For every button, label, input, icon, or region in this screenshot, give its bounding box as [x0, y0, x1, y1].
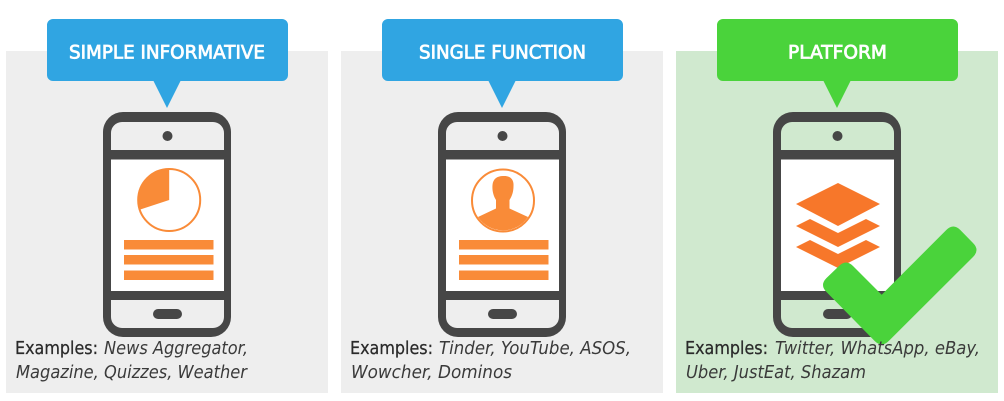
examples text: Uber, JustEat, Shazam: [686, 363, 866, 383]
examples text: Tinder, YouTube, ASOS,: [439, 339, 631, 359]
examples text: Magazine, Quizzes, Weather: [16, 363, 249, 383]
examples text: Twitter, WhatsApp, eBay,: [775, 339, 980, 359]
heading: simple informative callout: SIMPLE INFORMATIVE: [69, 42, 265, 64]
icon: green check mark: [823, 226, 976, 344]
icon: phone: [773, 112, 901, 337]
examples text: Examples:: [350, 339, 433, 359]
panel: simple informative: [6, 19, 328, 393]
heading: simple informative callout: [47, 19, 288, 108]
examples text: [15, 339, 249, 383]
examples text: [685, 339, 980, 383]
examples text: [350, 339, 631, 383]
icon: stacked layers: [796, 183, 880, 268]
text lines: [459, 240, 548, 280]
heading: platform callout: PLATFORM: [788, 42, 887, 64]
heading: single function callout: [382, 19, 623, 108]
text lines: [124, 240, 214, 280]
examples text: News Aggregator,: [104, 339, 248, 359]
icon: user avatar: [472, 170, 534, 232]
icon: phone: [103, 112, 231, 337]
panel: single function: [341, 19, 663, 393]
heading: single function callout: SINGLE FUNCTION: [419, 42, 586, 64]
icon: pie chart: [138, 169, 200, 231]
examples text: Wowcher, Dominos: [351, 363, 512, 383]
heading: platform callout: [717, 19, 958, 108]
examples text: Examples:: [685, 339, 768, 359]
panel: platform: [676, 19, 998, 393]
examples text: Examples:: [15, 339, 98, 359]
icon: phone: [438, 112, 566, 337]
